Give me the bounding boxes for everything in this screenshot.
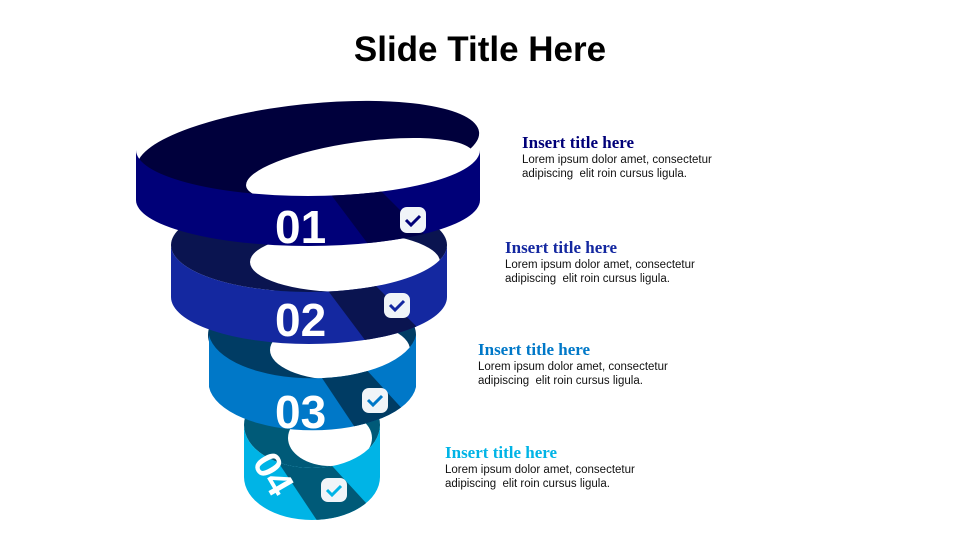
text block 2: Insert title here [505,238,617,257]
band 1: 01 [275,201,326,253]
text block 3: Insert title here [478,340,590,359]
text block 1: Lorem ipsum dolor amet, consectetur [522,154,712,166]
text block 4: adipiscing elit roin cursus ligula. [445,478,610,490]
text block 3: adipiscing elit roin cursus ligula. [478,375,643,387]
text block 2: Lorem ipsum dolor amet, consectetur [505,259,695,271]
band 4: 04 [244,446,301,503]
text block 2 [505,238,695,285]
band 3 [208,290,416,430]
funnel chart [136,100,480,520]
text block 1 [522,133,712,180]
text block 4: Lorem ipsum dolor amet, consectetur [445,464,635,476]
text block 3 [478,340,668,387]
text block 4 [445,443,635,490]
text block 1: Insert title here [522,133,634,152]
band 4 [244,418,380,520]
band 3: 03 [275,386,326,438]
text block 3: Lorem ipsum dolor amet, consectetur [478,361,668,373]
title: Slide Title Here [354,30,606,69]
text block 2: adipiscing elit roin cursus ligula. [505,273,670,285]
band 1 [136,100,480,246]
band 2 [171,230,447,344]
text block 4: Insert title here [445,443,557,462]
band 2: 02 [275,294,326,346]
text block 1: adipiscing elit roin cursus ligula. [522,168,687,180]
